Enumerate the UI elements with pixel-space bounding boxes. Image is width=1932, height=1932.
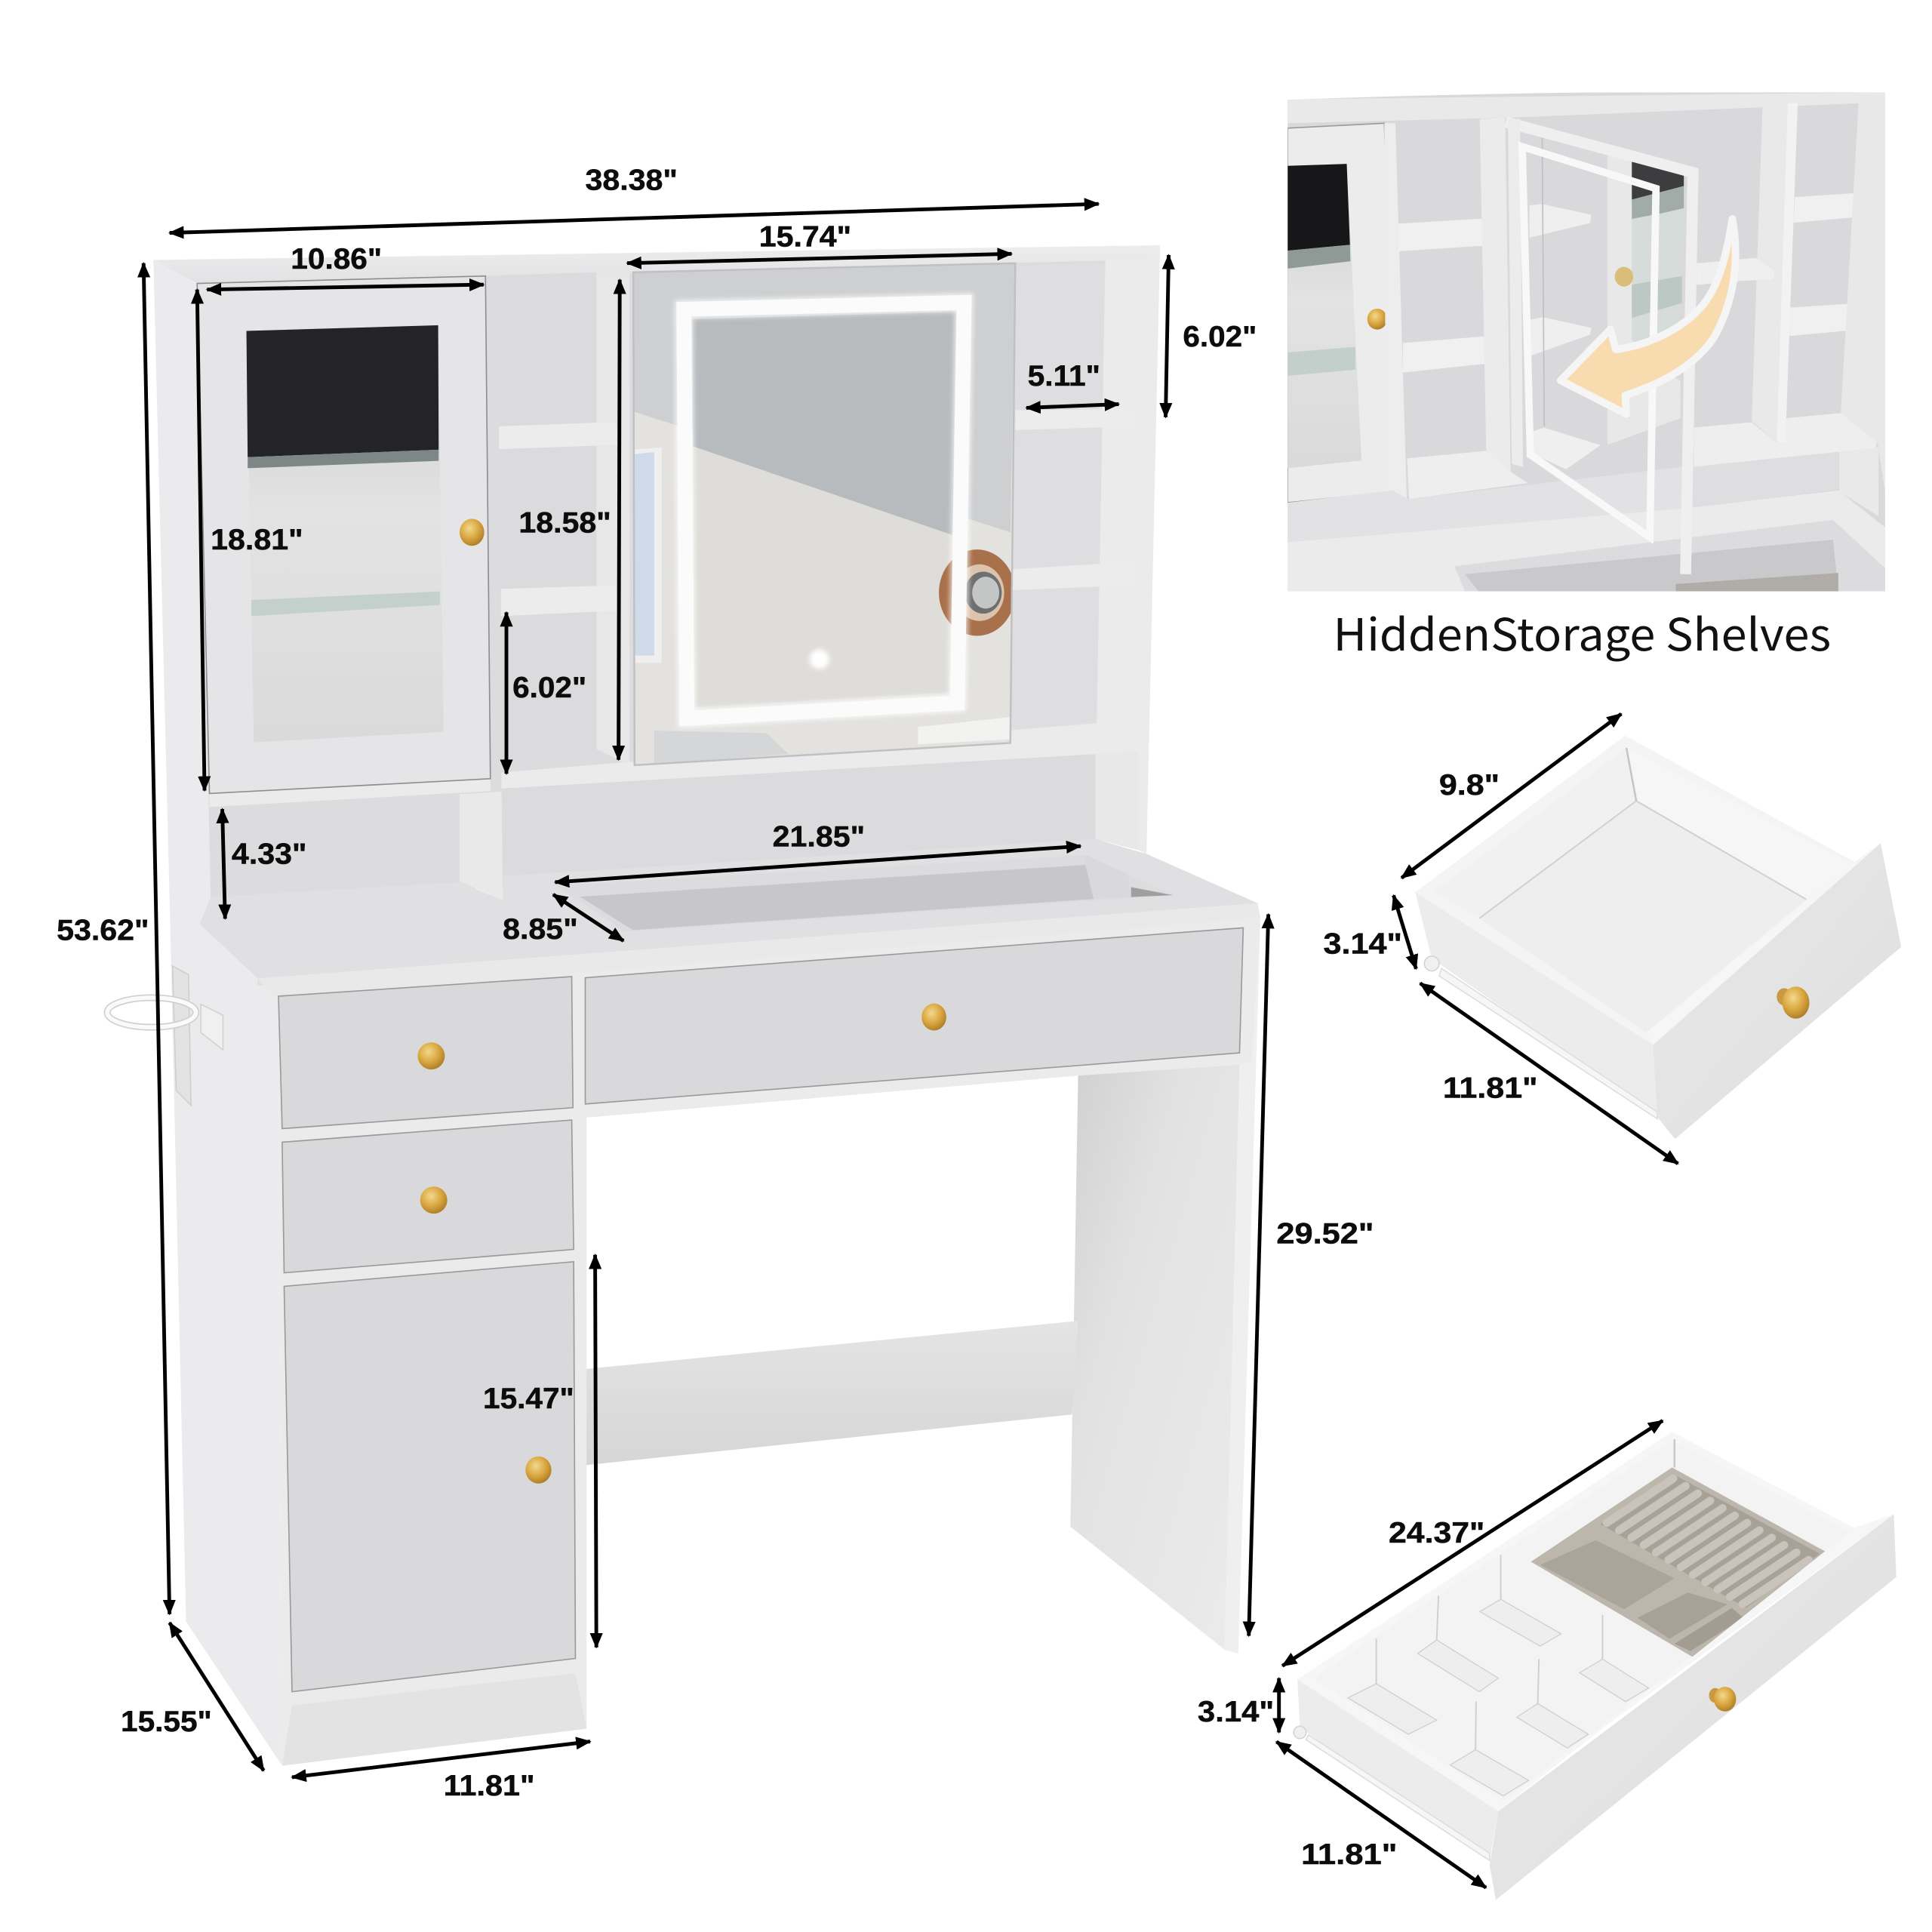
inner mirror reflection: [693, 312, 955, 535]
dimension: mirror width: [627, 221, 1011, 263]
dimension: door width: 10.86": [291, 243, 382, 275]
cabinet plinth: [282, 1673, 586, 1766]
drawer slide: [1424, 956, 1657, 1118]
dimension: glass well depth: [503, 894, 623, 946]
drawer back wall: [1626, 748, 1852, 900]
middle shelf lower: [501, 586, 621, 616]
drawer knob: [417, 1042, 445, 1069]
large compartment: [1540, 1540, 1675, 1609]
drawer side face: [1415, 892, 1657, 1115]
drawer interior: [1313, 1441, 1852, 1801]
dimension: desk height: 29.52": [1276, 1217, 1374, 1250]
hutch right side panel: [1095, 245, 1160, 854]
main hutch shelf: [501, 723, 1139, 789]
right shelf lower: [1011, 561, 1132, 590]
dimension: cabinet width: [292, 1742, 590, 1802]
door knob: [460, 518, 485, 546]
lower compartment back panel: [503, 754, 1095, 876]
inner corner edge: [1626, 748, 1636, 801]
dimension: door width: [207, 243, 484, 290]
dimension: organizer drawer width: 11.81": [1301, 1838, 1397, 1871]
dimension: lower shelf height: 6.02": [512, 672, 586, 704]
glass well in photo: [1454, 520, 1885, 592]
dimension: glass well width: 21.85": [773, 821, 865, 854]
reflected bronze ring: [939, 549, 1015, 635]
middle shelf upper: [499, 422, 621, 449]
dimension: small drawer height: 3.14": [1323, 928, 1402, 961]
dimension: small drawer width: 11.81": [1443, 1072, 1538, 1105]
desk apron front: [572, 918, 1260, 1729]
drawer front top edge: [1647, 843, 1881, 1044]
floor back edges: [1479, 801, 1806, 918]
groove bed: [1601, 1475, 1820, 1608]
dimension: overall width: 38.38": [586, 164, 678, 196]
mirror edge: [633, 263, 1015, 765]
drawer outer rim: [1415, 736, 1856, 1044]
knob: [1367, 309, 1387, 330]
top band: [1287, 92, 1885, 123]
right column: [1752, 106, 1788, 442]
upper glass shelf: [248, 450, 438, 468]
dimension: compartment height: 4.33": [232, 838, 307, 870]
side power outlets: [173, 966, 191, 1105]
desk right leg front edge: [1225, 918, 1260, 1654]
dimension: small drawer width: [1420, 983, 1678, 1164]
drawer front panel: [1653, 843, 1901, 1139]
left strip panel: [1384, 123, 1407, 498]
desktop front band: [257, 903, 1260, 1001]
shelf below glass door: [210, 779, 491, 807]
dimension: small drawer height: [1323, 895, 1416, 969]
caption: hidden storage: HiddenStorage Shelves: [1334, 599, 1831, 663]
drawer knob: [921, 1004, 946, 1031]
cabinet left side panel: [170, 918, 282, 1766]
compartment divider edges: [1377, 1555, 1602, 1749]
drawer knob: [1709, 1687, 1736, 1712]
right side panel: [1841, 96, 1885, 493]
dimension: organizer drawer height: 3.14": [1198, 1696, 1274, 1728]
dimension: top shelf height: 6.02": [1183, 321, 1257, 353]
door knob: [525, 1457, 552, 1484]
LED light band: [684, 303, 964, 718]
drawer left wall: [1434, 748, 1636, 918]
drawer front panel: [1490, 1515, 1897, 1900]
reflected bed pillows: [654, 731, 789, 764]
hutch back wall: [197, 253, 1109, 906]
dimension: mirror width: 15.74": [759, 221, 851, 254]
small left compartment: [211, 795, 460, 897]
dimension: glass well width: [555, 821, 1081, 882]
drawer rim: [1297, 1432, 1854, 1811]
drawer knob: [1777, 986, 1810, 1019]
medium compartment: [1638, 1592, 1727, 1638]
open door frame: [1506, 119, 1693, 574]
top right drawer: [586, 928, 1243, 1104]
left cabinet front: [278, 974, 586, 1766]
dimension: top shelf height: [1165, 255, 1257, 417]
dimension: small drawer depth: 9.8": [1439, 769, 1500, 801]
glass door cabinet: [197, 276, 491, 793]
lit mirror: [622, 263, 1015, 765]
dimension: door height: 18.81": [211, 524, 303, 556]
dimension: shelf depth: [1026, 360, 1118, 408]
dimension: overall width: [170, 164, 1099, 233]
hair tool holder ring: [107, 998, 223, 1050]
dimension: organizer drawer width: [1276, 1742, 1486, 1887]
dimension: glass well depth: 8.85": [503, 913, 578, 946]
left column: [1480, 118, 1511, 472]
dimension: depth: [121, 1623, 263, 1770]
lower cabinet door: [284, 1262, 575, 1692]
panel: hidden storage photo: [1287, 92, 1885, 592]
inner cabinet behind door: [1530, 131, 1684, 469]
drawer floor: [1479, 801, 1806, 1032]
door glass pane: [247, 325, 444, 743]
left shelf lower: [1403, 337, 1484, 373]
dimension: cabinet width: 11.81": [444, 1770, 535, 1802]
upper left drawer: [278, 977, 573, 1129]
dimension: depth: 15.55": [121, 1706, 212, 1738]
hutch left side panel: [153, 260, 211, 924]
lower left drawer: [282, 1120, 574, 1273]
dimension: compartment height: [223, 809, 307, 918]
back corner edge: [1674, 1439, 1675, 1467]
left glass door: [1287, 123, 1397, 503]
left floor shelf: [1407, 451, 1527, 499]
right shelf upper: [1015, 409, 1137, 430]
right shelf lower: [1789, 303, 1847, 337]
jewelry tray: [1531, 1467, 1829, 1657]
shelf behind arrow: [1697, 258, 1757, 285]
touch button: [810, 649, 829, 669]
compartment divider: [460, 792, 503, 900]
dimension: shelf depth: 5.11": [1028, 360, 1100, 392]
panel: organizer drawer: [1294, 1432, 1897, 1900]
left shelf upper: [1398, 219, 1482, 251]
drawer side face: [1297, 1679, 1498, 1860]
dimension: desk height: [1249, 914, 1374, 1636]
dimension: door height: [197, 290, 303, 791]
dimension: overall height: [57, 263, 170, 1614]
desktop in photo: [1287, 491, 1885, 592]
reflected art frame: [635, 447, 661, 663]
ring grooves: [1607, 1478, 1809, 1604]
dimension: organizer drawer length: 24.37": [1389, 1517, 1484, 1549]
lower right back panels: [1692, 448, 1839, 509]
hutch top panel: [153, 245, 1160, 284]
desktop: [199, 839, 1257, 986]
panel: small drawer: [1415, 736, 1901, 1139]
main vanity illustration: [107, 245, 1260, 1766]
dimension: organizer drawer length: [1282, 1420, 1663, 1666]
drawer front top edge: [1498, 1515, 1894, 1811]
drawer knob: [420, 1186, 448, 1214]
desktop glass well: [555, 855, 1173, 931]
dimension: legroom height: 15.47": [483, 1383, 574, 1415]
dark upper backing: [247, 325, 438, 457]
arrow: door swings open: [1561, 219, 1736, 414]
white compartment floors: [1348, 1599, 1648, 1796]
right shelf column wall: [1011, 263, 1105, 733]
dimension: organizer drawer height: [1198, 1678, 1279, 1733]
dimension: small drawer depth: [1401, 714, 1621, 878]
dimension: overall height: 53.62": [57, 915, 149, 947]
lower band under shelves: [1287, 466, 1692, 542]
drawer slide: [1294, 1726, 1490, 1860]
small compartment: [1675, 1608, 1743, 1651]
dimension: mirror height: 18.58": [518, 506, 611, 539]
crossbar: [586, 1321, 1078, 1465]
desk right leg inner face: [1070, 1065, 1239, 1650]
right lower block: [1095, 752, 1139, 851]
lower glass shelf: [251, 592, 440, 616]
right lower shelf: [1694, 413, 1877, 466]
right shelf upper: [1793, 193, 1854, 223]
middle shelf column wall: [498, 272, 596, 770]
